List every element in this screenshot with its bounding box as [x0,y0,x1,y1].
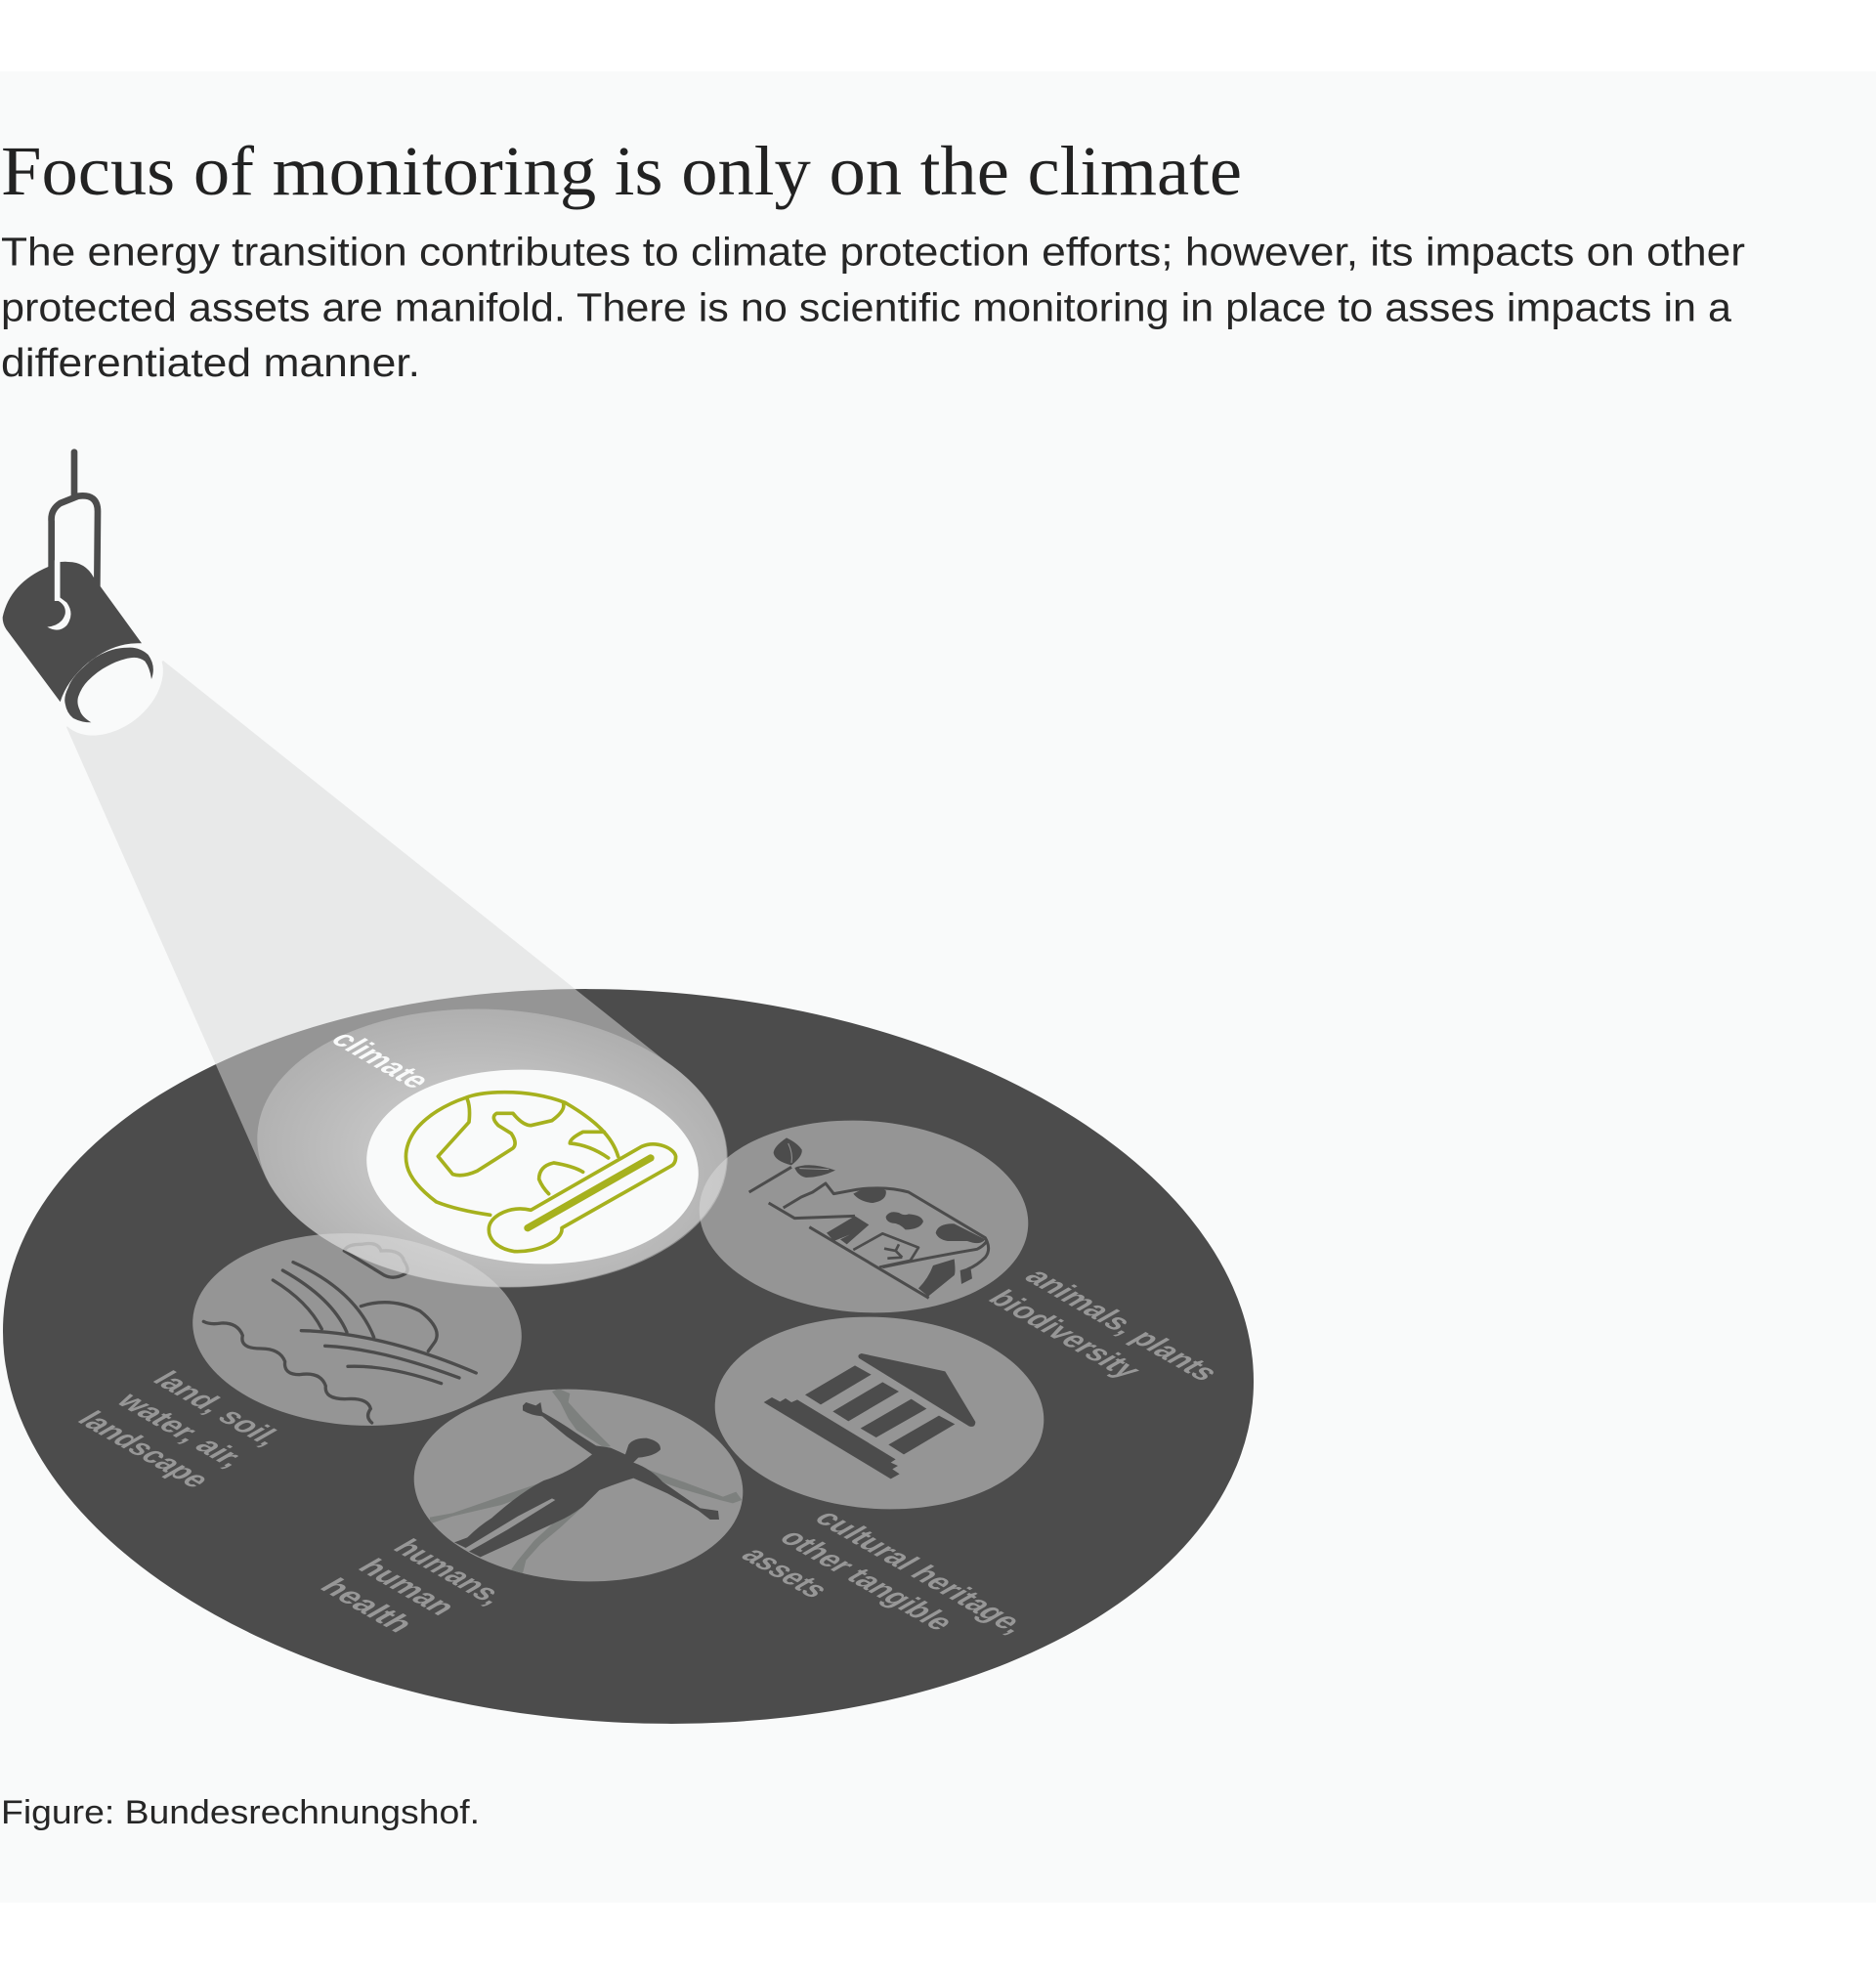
label: humans, human health: health [313,1573,423,1637]
panel: land circle [187,1223,528,1436]
spotlight pool [249,996,736,1301]
label: land, soil, water, air, landscape [70,1366,291,1492]
label: animals, plants, biodiversity: animals, plants [1017,1264,1228,1386]
icon: human figure with ghost pose [430,1389,742,1573]
panel: animals and plants circle [694,1111,1034,1322]
panel: climate circle [361,1060,704,1273]
icon: plant and cow [749,1137,989,1298]
text block: introduction: protected assets are manifold. There is no scientific monitoring in place to asses impacts in a [1,285,1731,330]
label: humans, human health: human [351,1554,465,1620]
icon: temple [764,1353,975,1479]
label: cultural heritage, other tangible assets [734,1505,1037,1638]
icon: spotlight lamp [3,452,182,755]
label: humans, human health: humans, [386,1534,515,1609]
label: cultural heritage, other tangible assets: assets [734,1542,837,1603]
label: land, soil, water, air, landscape: land, soil, [146,1366,291,1450]
text block: introduction: The energy transition contributes to climate protection efforts; however, its impacts on other [1,229,1745,274]
text block: introduction [1,229,1745,385]
text block: introduction: differentiated manner. [1,340,420,385]
source note: Figure: Bundesrechnungshof. [1,1794,480,1831]
light beam [66,661,727,1287]
label: climate: climate [323,1026,440,1093]
label: land, soil, water, air, landscape: landscape [70,1406,219,1492]
label: animals, plants, biodiversity: biodiversity [981,1285,1151,1383]
panel: dark floor disc [0,953,1275,1760]
label: cultural heritage, other tangible assets: other tangible [772,1524,963,1635]
panel: cultural heritage circle [709,1308,1049,1519]
panel: humans circle [414,1390,743,1581]
label: humans, human health [313,1534,515,1637]
title: Focus of monitoring is only on the climate [1,132,1242,210]
icon: globe and thermometer [405,1093,676,1252]
label: land, soil, water, air, landscape: water, air, [108,1388,255,1472]
label: cultural heritage, other tangible assets: cultural heritage, [807,1505,1037,1638]
icon: land, water, sun and cloud [203,1243,476,1423]
